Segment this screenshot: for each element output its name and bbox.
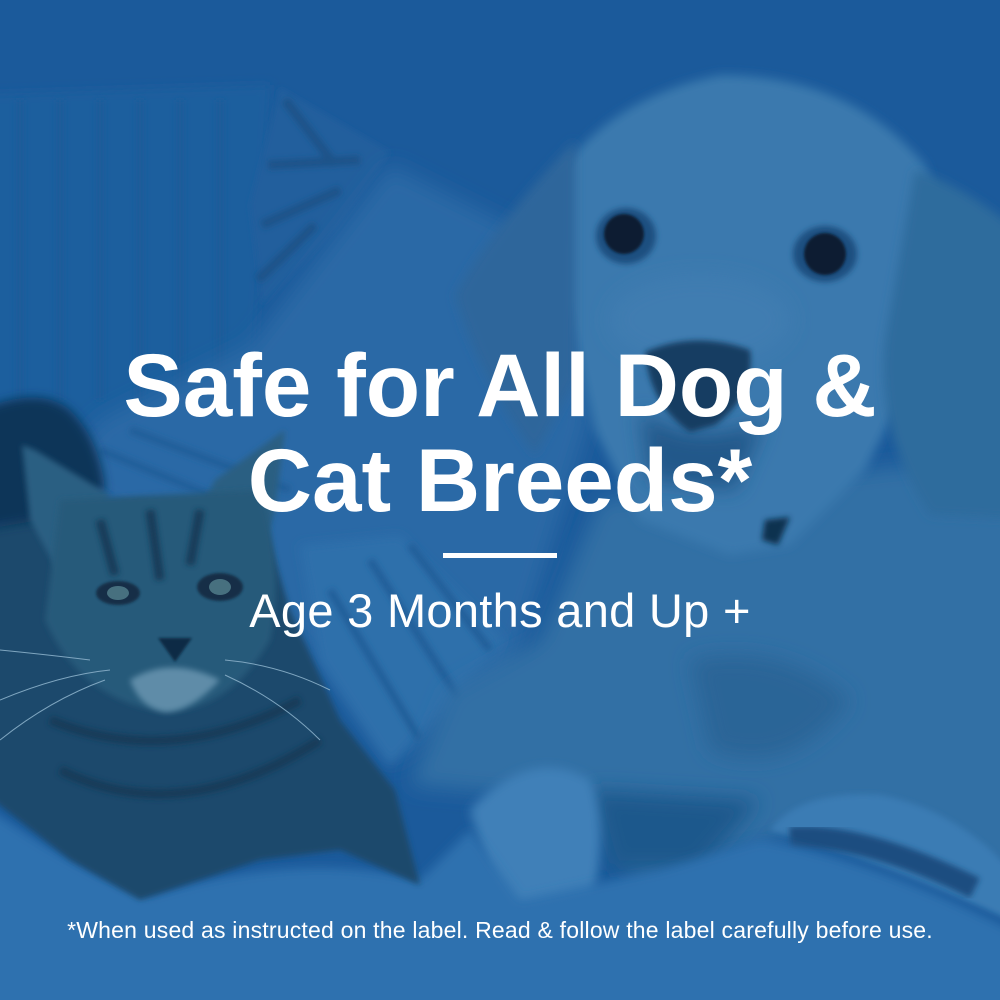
dog head [455, 75, 1000, 555]
pillow stripes at left [0, 85, 390, 430]
cat [0, 398, 420, 900]
title [123, 335, 877, 530]
footnote: *When used as instructed on the label. Read & follow the label carefully before use. [67, 917, 933, 943]
title: Cat Breeds* [248, 430, 752, 530]
dog nose and mouth [640, 340, 790, 545]
dog eyes [596, 208, 857, 282]
title: Safe for All Dog & [123, 335, 877, 435]
dog paw [470, 768, 600, 910]
golden retriever body [410, 450, 1000, 880]
white cushion behind the animals [60, 165, 590, 765]
bed foreground [0, 790, 1000, 1000]
subtitle: Age 3 Months and Up + [249, 584, 751, 637]
divider line [443, 553, 557, 558]
striped blanket at right [770, 794, 1000, 925]
